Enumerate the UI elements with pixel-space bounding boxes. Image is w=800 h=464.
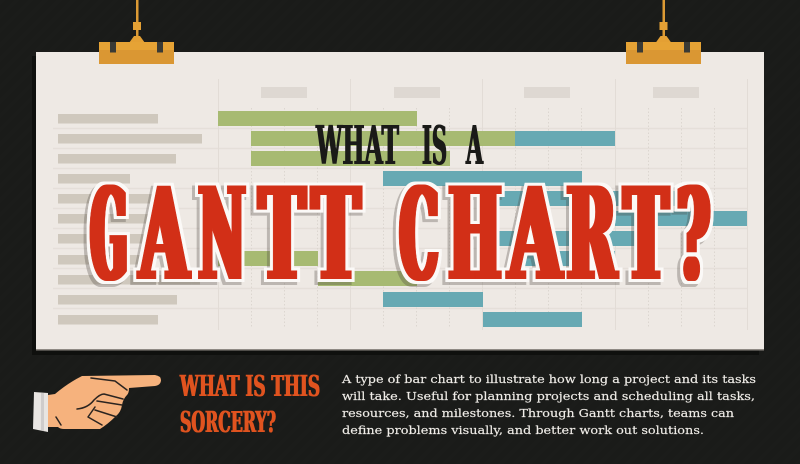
title line: gantt chart?: A — [140, 160, 189, 308]
timeline header chips — [261, 87, 699, 98]
teal gantt bars — [383, 131, 747, 327]
description text: will take. Useful for planning projects and scheduling all tasks, — [342, 389, 755, 403]
description text: define problems visually, and better work out solutions. — [342, 423, 704, 437]
title line: gantt chart?: N — [199, 160, 245, 308]
description text: resources, and milestones. Through Gantt charts, teams can — [342, 406, 735, 420]
title line: gantt chart?: G — [91, 160, 127, 308]
text: ? — [677, 160, 710, 308]
title line: what is a: WHAT — [316, 115, 399, 177]
right hanging clamp — [626, 0, 701, 64]
title line: gantt chart?: R — [567, 160, 617, 308]
description text: A type of bar chart to illustrate how long a project and its tasks — [341, 372, 756, 386]
left hanging clamp — [99, 0, 174, 64]
panel shadow — [32, 56, 759, 355]
description text — [341, 372, 756, 437]
green gantt bars — [218, 111, 515, 286]
title line: gantt chart?: T — [259, 160, 305, 308]
task label placeholders — [58, 114, 202, 324]
title line: gantt chart?: A — [508, 160, 562, 308]
heading: what is this sorcery — [179, 369, 320, 439]
title line: gantt chart?: H — [449, 160, 501, 308]
panel: gantt chart board — [36, 52, 764, 350]
title line: gantt chart? — [91, 160, 710, 308]
title line: gantt chart?: C — [400, 160, 438, 308]
icon: pointing hand — [33, 375, 161, 432]
heading: what is this sorcery: SORCERY? — [180, 405, 276, 439]
title line: gantt chart?: T — [312, 160, 360, 308]
title line: what is a: IS — [422, 115, 447, 177]
text: A — [466, 115, 483, 177]
title line: gantt chart?: T — [624, 160, 668, 308]
heading: what is this sorcery: WHAT IS THIS — [179, 369, 320, 403]
